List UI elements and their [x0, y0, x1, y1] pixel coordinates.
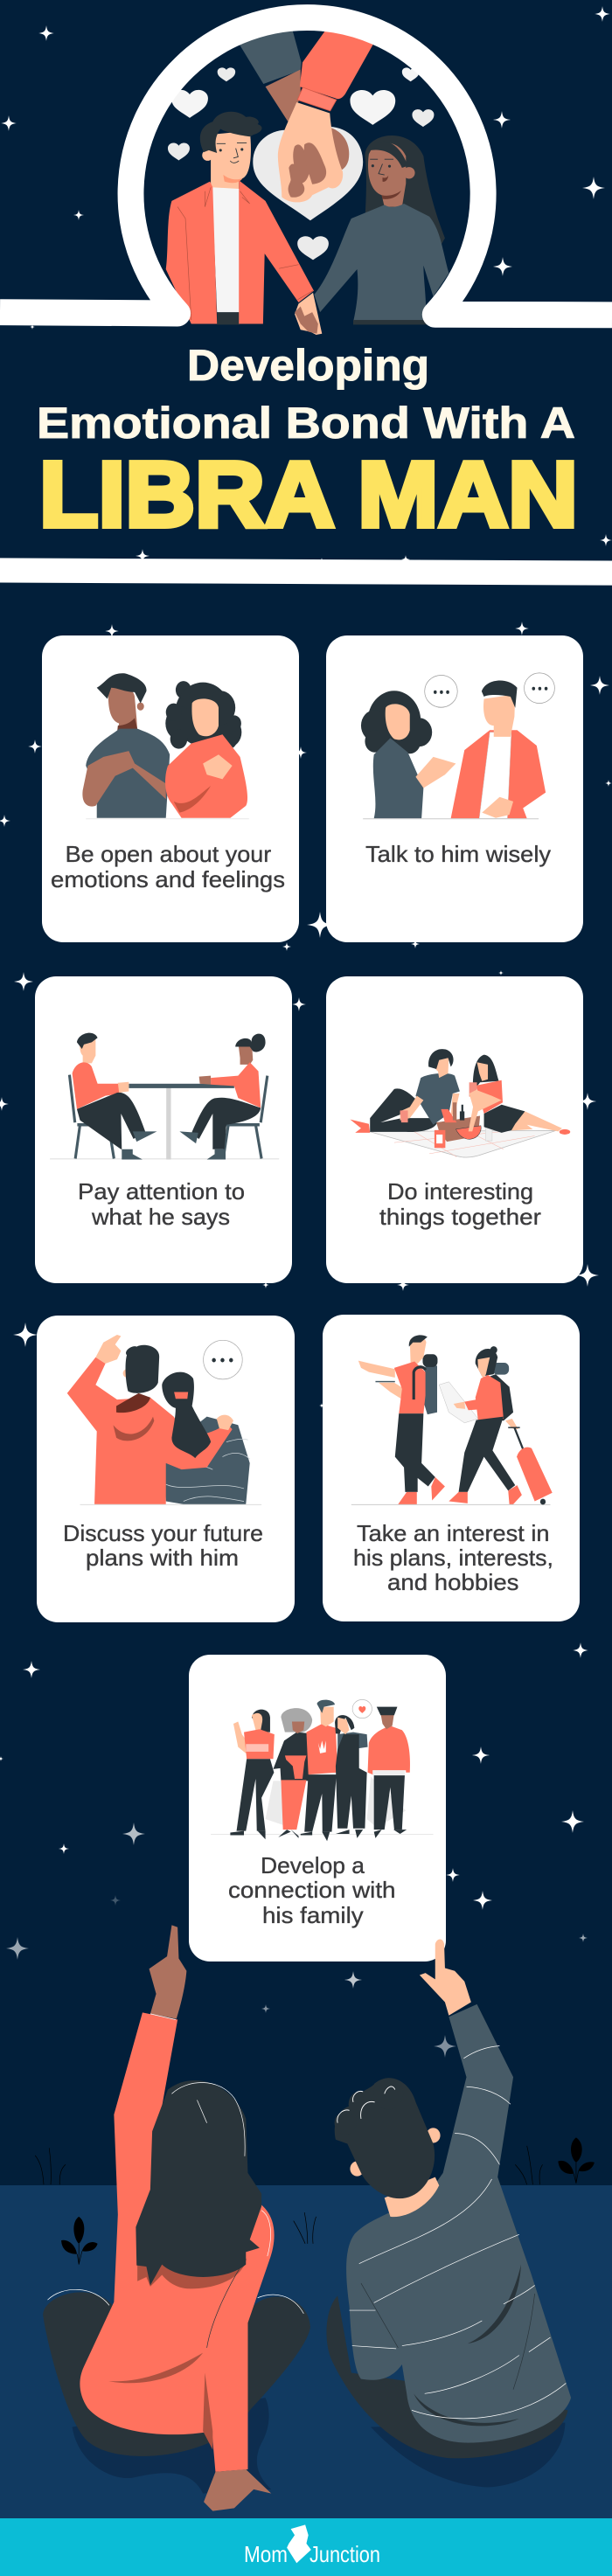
title: [37, 341, 578, 546]
header illustration: couple holding hands inside Libra ring: [0, 17, 612, 586]
logo icon: mother and child over heart: [287, 2524, 311, 2563]
caption: things together: [379, 1204, 541, 1230]
caption: his family: [262, 1902, 364, 1928]
woman: [314, 135, 449, 324]
caption: [63, 1520, 263, 1571]
panel: Develop a connection with his family: [189, 1655, 446, 1962]
illustration: couple with hands on hearts: [82, 673, 249, 819]
panel: Pay attention to what he says: [35, 976, 292, 1283]
caption: Do interesting: [387, 1178, 533, 1205]
title line: Emotional Bond With A: Emotional Bond With A: [37, 399, 575, 448]
panel: Take an interest in his plans, interests, and hobbies: [323, 1315, 580, 1621]
caption: Be open about your: [66, 841, 272, 867]
woman: [43, 1925, 310, 2511]
panel: Be open about your emotions and feelings: [42, 635, 299, 942]
plants and grass: [35, 2137, 595, 2265]
lower white bar: [0, 558, 612, 586]
caption: what he says: [91, 1204, 230, 1230]
caption: plans with him: [86, 1545, 239, 1571]
logo wordmark: Mom: [244, 2541, 288, 2567]
man: [326, 1939, 571, 2458]
caption: Discuss your future: [63, 1520, 263, 1546]
MomJunction logo: [244, 2524, 380, 2567]
caption: [379, 1178, 541, 1230]
Libra ring and bar: [0, 17, 612, 315]
caption: [78, 1178, 245, 1230]
illustration: couple having a picnic: [350, 1049, 570, 1157]
title line: LIBRA MAN: LIBRA MAN: [39, 443, 578, 546]
caption: [228, 1852, 395, 1928]
panel: Talk to him wisely: [326, 635, 583, 942]
shadows: [73, 2398, 565, 2494]
logo wordmark second part: Junction: [309, 2541, 380, 2567]
panel: Do interesting things together: [326, 976, 583, 1283]
caption: Develop a: [261, 1852, 365, 1878]
illustration: couple talking: [361, 673, 554, 819]
illustration: couple seen from behind: [67, 1335, 261, 1505]
caption: Talk to him wisely: [365, 841, 551, 867]
title line: Developing: Developing: [187, 341, 429, 390]
footer bar: [0, 2518, 612, 2576]
panel: Discuss your future plans with him: [37, 1316, 295, 1622]
illustration: travelling couple: [351, 1335, 553, 1505]
caption: his plans, interests,: [353, 1545, 553, 1571]
caption: Pay attention to: [78, 1178, 245, 1205]
hearts: [168, 67, 434, 260]
clasped arms and hands: [237, 28, 374, 202]
man: [166, 112, 322, 335]
caption: [353, 1520, 553, 1595]
caption: Take an interest in: [357, 1520, 549, 1546]
bottom illustration: couple sitting and pointing at stars: [35, 1925, 595, 2511]
caption: and hobbies: [387, 1569, 519, 1595]
illustration: couple sitting at a table: [50, 1033, 279, 1160]
caption: emotions and feelings: [51, 866, 285, 892]
caption: [51, 841, 285, 892]
caption: connection with: [228, 1877, 395, 1903]
ground: [0, 2185, 612, 2518]
stars: [0, 6, 612, 2058]
illustration: group of five friends: [211, 1699, 434, 1841]
